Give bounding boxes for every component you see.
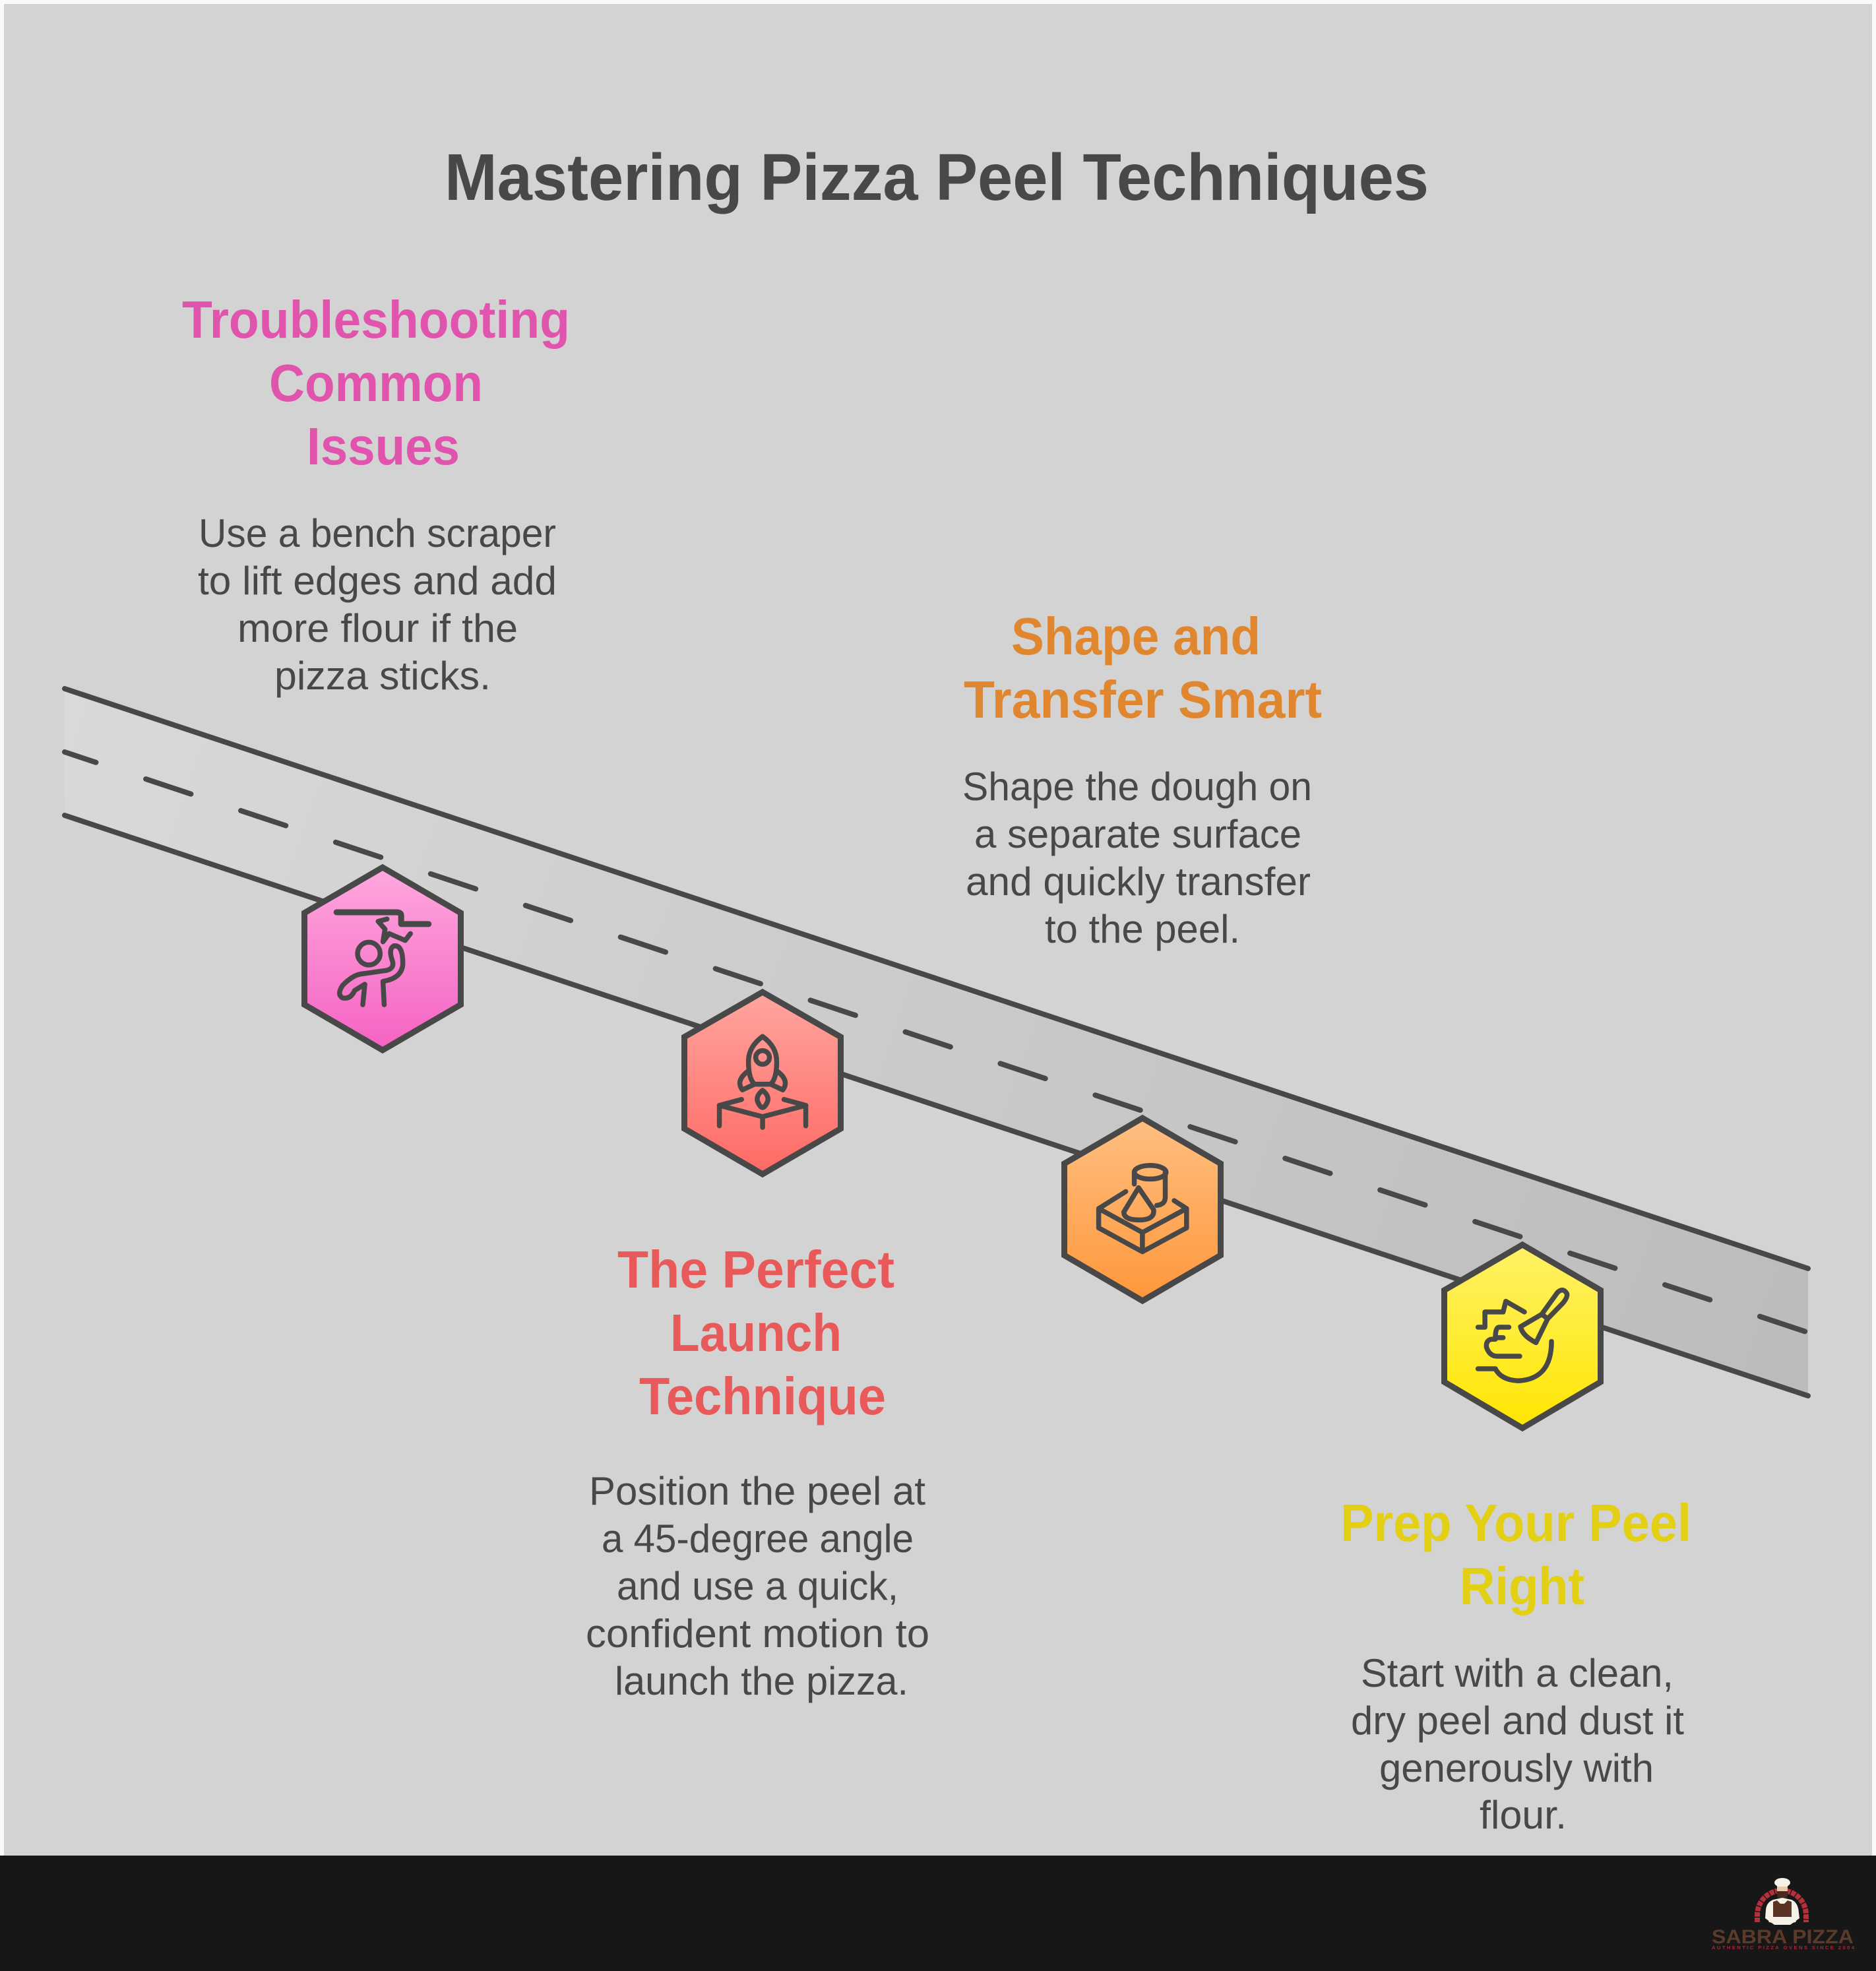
heading [182, 290, 570, 476]
description [1351, 1651, 1684, 1837]
heading: Launch [670, 1303, 842, 1362]
hexagon: yellow [1445, 1245, 1600, 1428]
description: a separate surface [974, 812, 1301, 856]
heading [1340, 1493, 1691, 1615]
step: prep your peel right [1340, 1245, 1691, 1837]
step: troubleshooting common issues [182, 290, 570, 1050]
step: shape and transfer smart [962, 607, 1322, 1301]
road diagram [65, 689, 1808, 1396]
heading: Technique [639, 1367, 886, 1425]
logo tagline: AUTHENTIC PIZZA OVENS SINCE 2004 [1712, 1945, 1855, 1951]
heading: The Perfect [617, 1240, 894, 1299]
description [198, 511, 557, 698]
hexagon: pink [305, 867, 460, 1050]
description: to the peel. [1045, 907, 1240, 951]
description: Start with a clean, [1361, 1651, 1673, 1695]
icon: shapes on a block [1099, 1166, 1187, 1252]
icon: person with falling crack [336, 912, 429, 1005]
icon: brick arch [1757, 1891, 1806, 1922]
step: the perfect launch technique [586, 992, 929, 1703]
description: a 45-degree angle [602, 1517, 914, 1561]
title: Mastering Pizza Peel Techniques [445, 141, 1429, 214]
footer bar [0, 1856, 1876, 1971]
description: to lift edges and add [198, 559, 557, 603]
description [586, 1469, 929, 1703]
heading [964, 607, 1322, 729]
description: launch the pizza. [615, 1659, 908, 1703]
description: confident motion to [586, 1611, 929, 1656]
description: dry peel and dust it [1351, 1699, 1684, 1743]
description [962, 765, 1312, 951]
heading: Right [1460, 1557, 1584, 1615]
hexagon: orange [1065, 1118, 1220, 1301]
heading: Troubleshooting [182, 290, 570, 349]
heading: Transfer Smart [964, 670, 1322, 729]
description: Use a bench scraper [199, 511, 556, 555]
description: more flour if the [237, 606, 518, 650]
icon: chef [1765, 1878, 1799, 1925]
hexagon: red [685, 992, 840, 1174]
description: and use a quick, [617, 1564, 898, 1608]
description: generously with [1379, 1746, 1654, 1790]
description: Position the peel at [589, 1469, 925, 1513]
heading: Common [269, 354, 483, 412]
description: flour. [1480, 1793, 1567, 1837]
heading [617, 1240, 894, 1425]
description: and quickly transfer [966, 860, 1311, 904]
icon: rocket launch [720, 1036, 806, 1127]
heading: Prep Your Peel [1340, 1493, 1691, 1552]
heading: Issues [307, 417, 460, 476]
heading: Shape and [1011, 607, 1261, 666]
logo wordmark: SABRA PIZZA [1712, 1926, 1854, 1948]
description: pizza sticks. [274, 654, 491, 698]
description: Shape the dough on [962, 765, 1312, 809]
logo: Sabra Pizza [1712, 1878, 1855, 1951]
icon: brush and flour [1478, 1290, 1567, 1381]
